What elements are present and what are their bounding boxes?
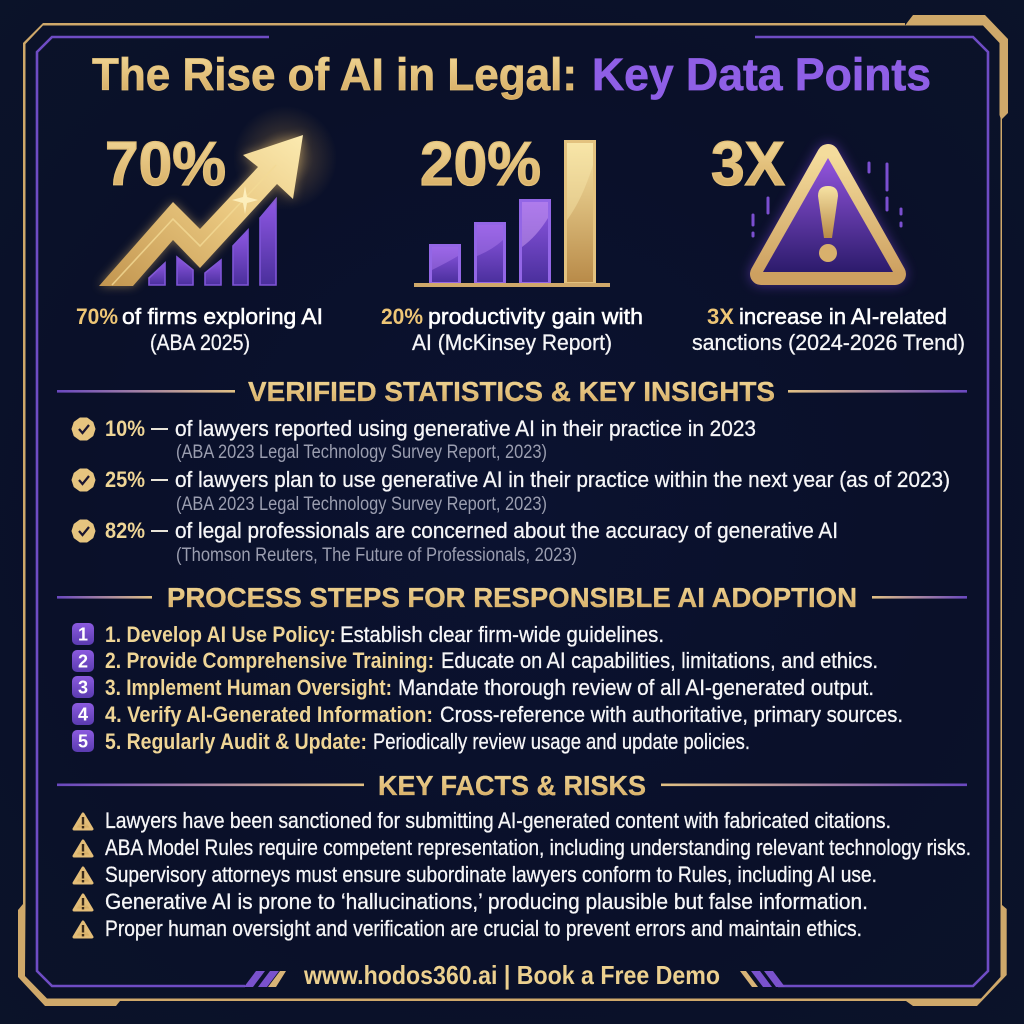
statistic: 82% bbox=[72, 518, 838, 566]
statistic: 10%: (ABA 2023 Legal Technology Survey Report, 2023) bbox=[176, 442, 547, 463]
20% figure: 20% bbox=[420, 130, 541, 199]
caption: of firms exploring AI bbox=[122, 304, 323, 329]
section: verified statistics bbox=[57, 376, 967, 566]
heading: VERIFIED STATISTICS & KEY INSIGHTS bbox=[248, 376, 775, 407]
3X figure: 3X bbox=[711, 130, 785, 199]
title bbox=[92, 49, 931, 100]
step 4: 4. Verify AI-Generated Information: bbox=[105, 702, 433, 727]
left slashes bbox=[244, 971, 286, 987]
step 4: 4 bbox=[78, 704, 88, 724]
statistic: 10%: of lawyers reported using generative AI in their practice in 2023 bbox=[175, 416, 756, 441]
title: Key Data Points bbox=[592, 49, 931, 100]
statistic: 82%: 82% bbox=[105, 518, 145, 543]
70% figure: 70% bbox=[105, 130, 226, 199]
step 5: Periodically review usage and update policies. bbox=[373, 729, 750, 754]
step 4 bbox=[72, 702, 903, 727]
step 4: Cross-reference with authoritative, primary sources. bbox=[440, 702, 903, 727]
caption: 3X bbox=[707, 304, 734, 329]
statistic: 10% bbox=[72, 416, 756, 463]
icon: rising bars bbox=[149, 199, 276, 285]
bar chart bbox=[414, 142, 610, 287]
risk 1: Lawyers have been sanctioned for submitting AI-generated content with fabricated citations. bbox=[105, 808, 891, 833]
step 2: Educate on AI capabilities, limitations, and ethics. bbox=[441, 648, 878, 673]
title: The Rise of AI in Legal: bbox=[92, 49, 577, 100]
step 1: Establish clear firm-wide guidelines. bbox=[340, 622, 664, 647]
step 3: Mandate thorough review of all AI-generated output. bbox=[398, 675, 874, 700]
risk 5: Proper human oversight and verification are crucial to prevent errors and maintain ethics. bbox=[105, 916, 862, 941]
caption: (ABA 2025) bbox=[150, 330, 250, 355]
step 2: 2. Provide Comprehensive Training: bbox=[105, 648, 434, 673]
step 1: 1 bbox=[78, 624, 88, 644]
icon: rising arrow bbox=[99, 106, 337, 286]
caption: sanctions (2024-2026 Trend) bbox=[692, 330, 965, 355]
call to action: www.hodos360.ai | Book a Free Demo bbox=[303, 960, 720, 990]
step 2: 2 bbox=[78, 652, 88, 672]
statistic: 82%: (Thomson Reuters, The Future of Professionals, 2023) bbox=[176, 545, 577, 566]
statistic: 25%: (ABA 2023 Legal Technology Survey Report, 2023) bbox=[176, 494, 547, 515]
section: process steps bbox=[57, 582, 967, 754]
caption: increase in AI-related bbox=[739, 304, 947, 329]
icon: warning triangle bbox=[753, 155, 901, 274]
caption: AI (McKinsey Report) bbox=[412, 330, 612, 355]
heading: KEY FACTS & RISKS bbox=[378, 770, 646, 801]
step 3 bbox=[72, 675, 874, 700]
section: key facts and risks bbox=[57, 770, 971, 941]
caption bbox=[692, 304, 965, 355]
step 3: 3 bbox=[78, 678, 88, 698]
step 5: 5 bbox=[78, 732, 88, 752]
statistic: 25%: 25% bbox=[105, 467, 145, 492]
caption bbox=[381, 304, 643, 355]
statistic: 82%: of legal professionals are concerned about the accuracy of generative AI bbox=[175, 518, 838, 543]
step 5 bbox=[72, 729, 750, 754]
step 1: 1. Develop AI Use Policy: bbox=[105, 622, 336, 647]
stat panel: 3X sanctions bbox=[692, 130, 965, 355]
caption: 20% bbox=[381, 304, 423, 329]
heading: PROCESS STEPS FOR RESPONSIBLE AI ADOPTION bbox=[167, 582, 857, 613]
step 5: 5. Regularly Audit & Update: bbox=[105, 729, 367, 754]
caption: productivity gain with bbox=[428, 304, 643, 329]
risk 3: Supervisory attorneys must ensure subordinate lawyers conform to Rules, including AI use. bbox=[105, 862, 877, 887]
step 1 bbox=[72, 622, 664, 647]
risk 4: Generative AI is prone to ‘hallucinations,’ producing plausible but false information. bbox=[105, 889, 868, 914]
footer bbox=[244, 960, 785, 990]
statistic: 10%: 10% bbox=[105, 416, 145, 441]
caption bbox=[76, 304, 323, 355]
right slashes bbox=[740, 971, 785, 987]
caption: 70% bbox=[76, 304, 118, 329]
step 3: 3. Implement Human Oversight: bbox=[105, 675, 392, 700]
stat panel: 70% of firms bbox=[76, 106, 337, 355]
statistic: 25% bbox=[72, 467, 950, 515]
stat panel: 20% productivity bbox=[381, 130, 643, 355]
step 2 bbox=[72, 648, 878, 673]
statistic: 25%: of lawyers plan to use generative AI in their practice within the next year (as of 2023) bbox=[175, 467, 950, 492]
